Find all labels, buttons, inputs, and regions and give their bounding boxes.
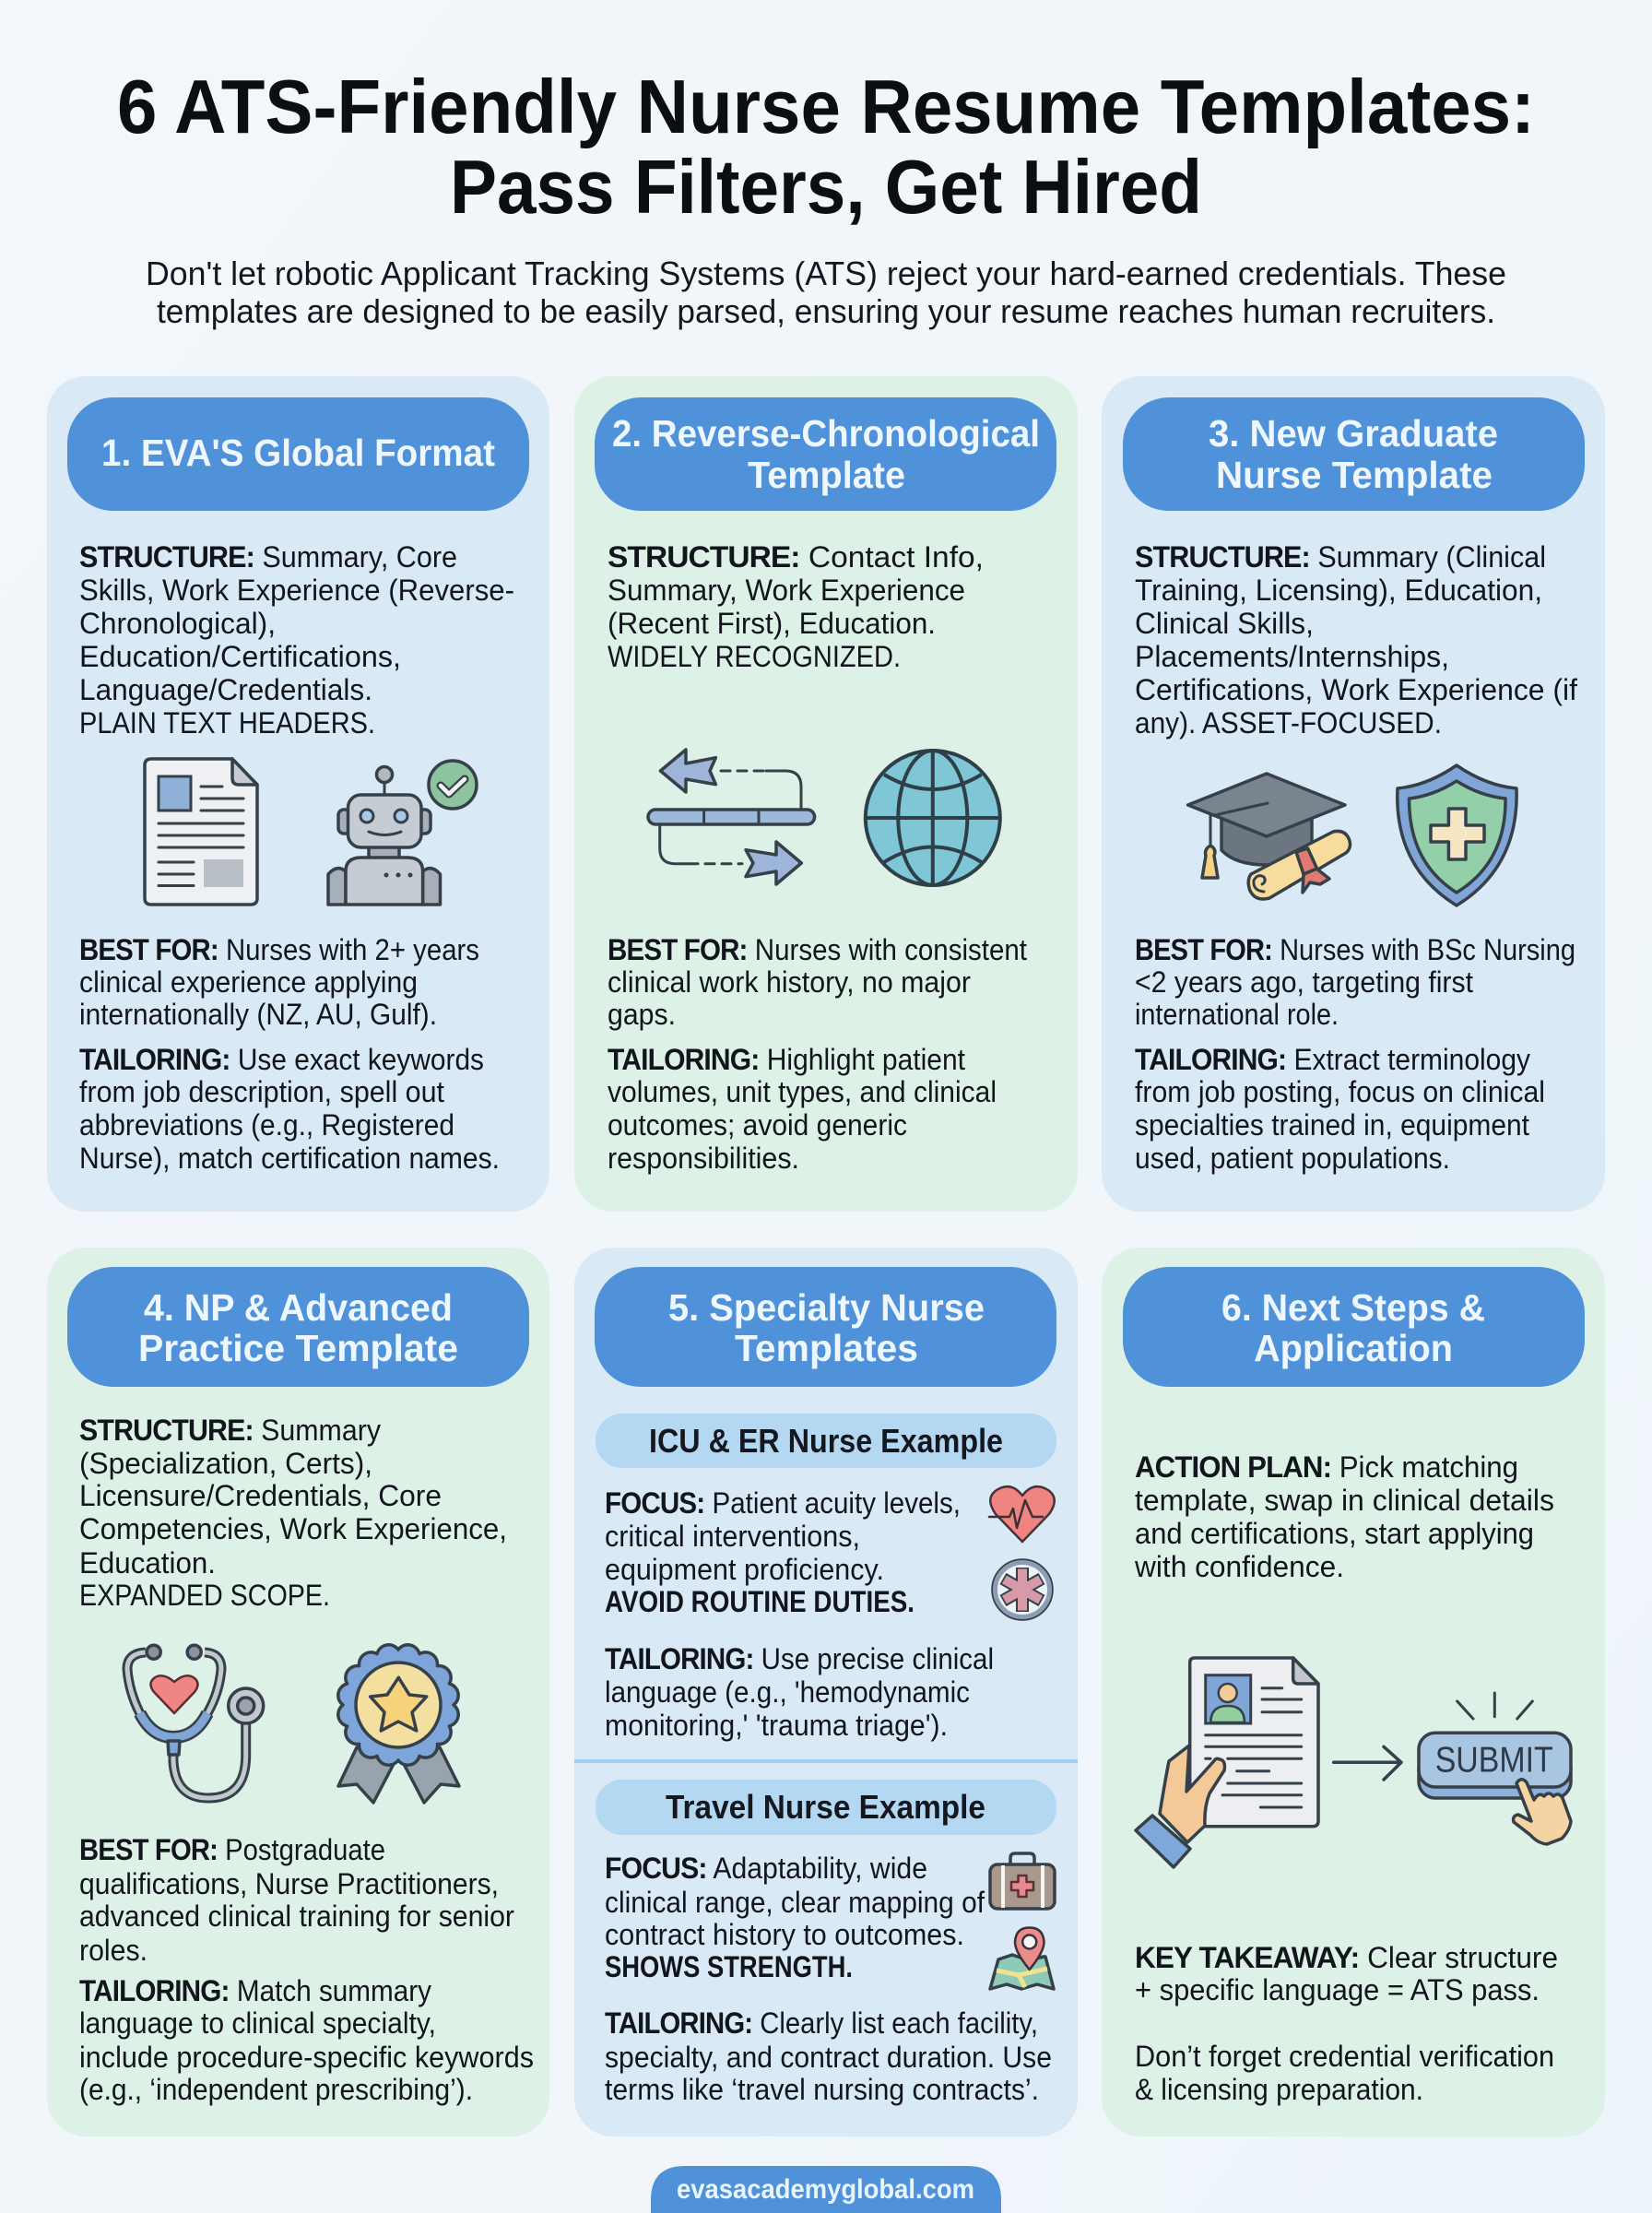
icon: hand holding resume: [1136, 1658, 1318, 1867]
text: best for: roles.: [79, 1934, 148, 1967]
heading: card 5: Templates: [735, 1327, 918, 1369]
text: tailoring: [79, 1043, 500, 1175]
heading: card 3: Nurse Template: [1216, 454, 1493, 496]
text: tailoring: include procedure-specific keywords: [79, 2041, 534, 2074]
text: structure: [79, 1414, 507, 1612]
footer website pill: [651, 2166, 1001, 2213]
title: 6 ATS-Friendly Nurse Resume Templates:: [117, 64, 1535, 149]
icon: heart with pulse: [989, 1486, 1055, 1542]
text: ICU focus: critical interventions,: [605, 1520, 860, 1553]
text: ICU tailoring: language (e.g., 'hemodynamic: [605, 1675, 970, 1709]
text: best for: <2 years ago, targeting first: [1135, 965, 1473, 999]
intro text: [146, 254, 1506, 330]
text: tailoring: [79, 1974, 534, 2106]
icon: robot with check badge: [328, 761, 477, 905]
text: action plan: template, swap in clinical details: [1135, 1484, 1554, 1517]
text: best for: BEST FOR: Postgraduate: [79, 1833, 385, 1866]
heading: card 4: Practice Template: [138, 1327, 458, 1369]
text: structure: [79, 540, 514, 740]
text: best for: international role.: [1135, 998, 1339, 1031]
text: structure: STRUCTURE: Summary, Core: [79, 540, 457, 574]
text: tailoring: outcomes; avoid generic: [608, 1108, 907, 1142]
text: structure: PLAIN TEXT HEADERS.: [79, 706, 375, 740]
icon: submit button with pointing hand: [1419, 1693, 1571, 1844]
icon: reverse timeline arrows: [648, 750, 815, 884]
heading: card 2: 2. Reverse-Chronological: [612, 412, 1040, 455]
text: ICU focus: FOCUS: Patient acuity levels,: [605, 1486, 961, 1520]
text: best for: [1135, 933, 1575, 1031]
text: best for: qualifications, Nurse Practitioners,: [79, 1867, 499, 1900]
heading: card 5: 5. Specialty Nurse: [668, 1286, 985, 1329]
text: tailoring: TAILORING: Highlight patient: [608, 1043, 965, 1076]
intro text: templates are designed to be easily parsed, ensuring your resume reaches human recruiters.: [157, 292, 1495, 330]
panel: 4. NP & Advanced Practice Template: [47, 1248, 549, 2136]
text: tailoring: language to clinical specialty,: [79, 2006, 436, 2040]
text: structure: Chronological),: [79, 607, 276, 640]
heading: card 2: Template: [748, 454, 905, 496]
text: structure: STRUCTURE: Summary (Clinical: [1135, 540, 1546, 574]
title: Pass Filters, Get Hired: [450, 144, 1202, 230]
text: structure: Education.: [79, 1546, 216, 1580]
text: credential reminder: [1135, 2040, 1554, 2106]
heading: card 4: 4. NP & Advanced: [144, 1286, 453, 1329]
text: structure: WIDELY RECOGNIZED.: [608, 640, 901, 673]
text: best for: advanced clinical training for senior: [79, 1899, 514, 1933]
text: tailoring: TAILORING: Match summary: [79, 1974, 431, 2007]
heading: card 1: [67, 397, 529, 511]
text: best for: BEST FOR: Nurses with 2+ years: [79, 933, 479, 966]
intro text: Don't let robotic Applicant Tracking Systems (ATS) reject your hard-earned credentials. These: [146, 254, 1506, 292]
text: structure: Summary, Work Experience: [608, 574, 965, 607]
heading: card 5: [595, 1267, 1056, 1387]
text: structure: Licensure/Credentials, Core: [79, 1479, 442, 1512]
text: tailoring: volumes, unit types, and clinical: [608, 1075, 997, 1108]
text: structure: Training, Licensing), Education,: [1135, 574, 1542, 607]
text: key takeaway: KEY TAKEAWAY: Clear structure: [1135, 1941, 1558, 1974]
text: action plan: ACTION PLAN: Pick matching: [1135, 1450, 1518, 1484]
text: structure: any). ASSET-FOCUSED.: [1135, 706, 1442, 740]
icon: resume document: [145, 759, 257, 905]
text: best for: [608, 933, 1027, 1031]
panel: 2. Reverse-Chronological Template: [574, 376, 1078, 1212]
heading: card 1: 1. EVA'S Global Format: [101, 432, 495, 474]
text: structure: Education/Certifications,: [79, 640, 401, 673]
heading: card 6: Application: [1254, 1327, 1453, 1369]
text: structure: Language/Credentials.: [79, 673, 372, 706]
subheading: Travel Nurse: [596, 1780, 1056, 1835]
text: structure: STRUCTURE: Summary: [79, 1414, 381, 1447]
text: structure: EXPANDED SCOPE.: [79, 1579, 330, 1612]
footer website pill: evasacademyglobal.com: [677, 2174, 974, 2205]
text: structure: Skills, Work Experience (Reverse-: [79, 574, 514, 607]
text: ICU focus: AVOID ROUTINE DUTIES.: [605, 1585, 914, 1618]
text: tailoring: specialties trained in, equipment: [1135, 1108, 1529, 1142]
title: [117, 64, 1535, 230]
text: tailoring: abbreviations (e.g., Registered: [79, 1108, 454, 1142]
heading: card 3: 3. New Graduate: [1209, 412, 1498, 455]
text: best for: [79, 933, 479, 1031]
panel: 6. Next Steps & Application: [1102, 1248, 1605, 2136]
text: ICU tailoring: TAILORING: Use precise clinical: [605, 1642, 994, 1675]
text: best for: gaps.: [608, 998, 676, 1031]
icon: submit button with pointing hand: SUBMIT: [1435, 1741, 1553, 1781]
heading: card 6: 6. Next Steps &: [1221, 1286, 1485, 1329]
arrow: [1334, 1746, 1401, 1780]
text: ICU focus: [605, 1486, 961, 1618]
text: tailoring: Nurse), match certification names.: [79, 1142, 500, 1175]
heading: card 2: [595, 397, 1056, 511]
text: tailoring: responsibilities.: [608, 1142, 799, 1175]
panel: 1. EVA'S Global Format: [47, 376, 549, 1212]
text: travel focus: FOCUS: Adaptability, wide: [605, 1852, 927, 1885]
text: travel focus: contract history to outcomes.: [605, 1918, 964, 1951]
text: best for: clinical experience applying: [79, 965, 418, 999]
icon: stethoscope with heart: [127, 1645, 264, 1798]
panel: 5. Specialty Nurse Templates: [574, 1248, 1078, 2136]
text: travel focus: SHOWS STRENGTH.: [605, 1950, 853, 1983]
subheading: ICU & ER: [596, 1414, 1056, 1468]
text: tailoring: [1135, 1043, 1545, 1175]
text: travel focus: [605, 1852, 985, 1983]
text: best for: BEST FOR: Nurses with consistent: [608, 933, 1027, 966]
subheading: ICU & ER: ICU & ER Nurse Example: [649, 1422, 1003, 1460]
text: travel focus: clinical range, clear mapping of: [605, 1886, 985, 1919]
icon: star of life: [992, 1560, 1053, 1619]
text: tailoring: from job description, spell out: [79, 1075, 444, 1108]
text: best for: BEST FOR: Nurses with BSc Nursing: [1135, 933, 1575, 966]
heading: card 6: [1123, 1267, 1585, 1387]
icon: medical suitcase: [990, 1853, 1055, 1909]
text: ICU focus: equipment proficiency.: [605, 1553, 884, 1586]
text: tailoring: from job posting, focus on clinical: [1135, 1075, 1545, 1108]
text: tailoring: used, patient populations.: [1135, 1142, 1450, 1175]
text: travel tailoring: terms like ‘travel nursing contracts’.: [605, 2073, 1039, 2106]
heading: card 4: [67, 1267, 529, 1387]
text: ICU tailoring: monitoring,' 'trauma triage').: [605, 1709, 948, 1742]
text: structure: (Specialization, Certs),: [79, 1447, 372, 1480]
text: credential reminder: & licensing preparation.: [1135, 2073, 1423, 2106]
text: best for: [79, 1833, 514, 1967]
text: tailoring: [608, 1043, 997, 1175]
subheading: Travel Nurse: Travel Nurse Example: [666, 1788, 985, 1826]
text: action plan: [1134, 1450, 1554, 1583]
text: structure: Competencies, Work Experience,: [79, 1512, 507, 1545]
text: best for: internationally (NZ, AU, Gulf).: [79, 998, 437, 1031]
icon: globe: [866, 751, 1000, 885]
text: key takeaway: + specific language = ATS pass.: [1135, 1973, 1540, 2006]
text: action plan: and certifications, start applying: [1135, 1517, 1534, 1550]
icon: graduation cap and diploma: [1188, 774, 1350, 899]
text: structure: STRUCTURE: Contact Info,: [608, 540, 984, 574]
text: tailoring: (e.g., ‘independent prescribing’).: [79, 2073, 473, 2106]
text: tailoring: TAILORING: Use exact keywords: [79, 1043, 484, 1076]
text: action plan: with confidence.: [1134, 1550, 1344, 1583]
panel: 3. New Graduate Nurse Template: [1102, 376, 1605, 1212]
text: key takeaway: [1135, 1941, 1558, 2006]
heading: card 3: [1123, 397, 1585, 511]
icon: map with pin: [990, 1927, 1054, 1989]
icon: award rosette with star: [338, 1645, 459, 1803]
text: tailoring: TAILORING: Extract terminology: [1135, 1043, 1530, 1076]
text: best for: clinical work history, no major: [608, 965, 971, 999]
text: credential reminder: Don’t forget credential verification: [1135, 2040, 1554, 2073]
text: travel tailoring: TAILORING: Clearly list each facility,: [605, 2006, 1038, 2040]
text: travel tailoring: [605, 2006, 1052, 2106]
text: structure: Clinical Skills,: [1135, 607, 1314, 640]
text: structure: Certifications, Work Experience (if: [1135, 673, 1577, 706]
text: ICU tailoring: [605, 1642, 994, 1742]
text: structure: Placements/Internships,: [1135, 640, 1449, 673]
text: structure: [1135, 540, 1577, 740]
text: structure: [608, 540, 984, 673]
text: travel tailoring: specialty, and contract duration. Use: [605, 2041, 1052, 2074]
icon: shield with cross: [1398, 765, 1516, 905]
text: structure: (Recent First), Education.: [608, 607, 936, 640]
